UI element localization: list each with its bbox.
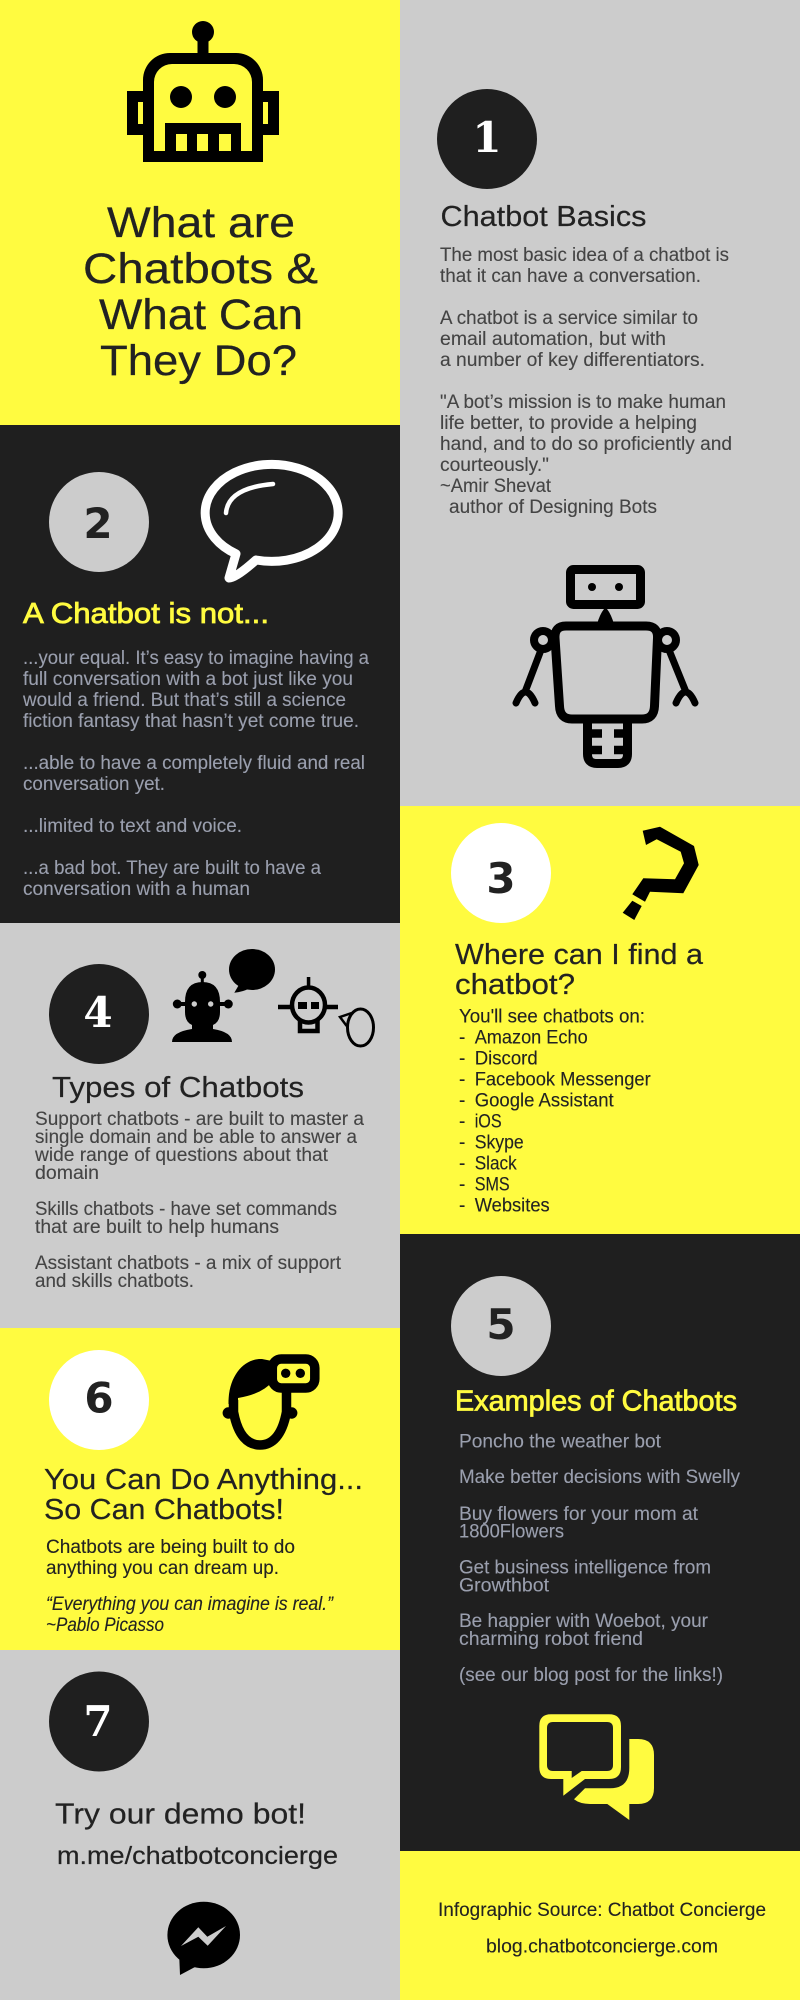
number badge 7: 7 (83, 1697, 113, 1746)
title: Chatbots & (83, 245, 318, 293)
text: basics body (440, 245, 732, 518)
panel: header (0, 0, 400, 425)
heading: you can do anything (44, 1464, 363, 1526)
heading: a chatbot is not: A Chatbot is not... (23, 598, 269, 630)
text: platform list: SMS (475, 1175, 510, 1196)
heading: types of chatbots: Types of Chatbots (52, 1072, 304, 1104)
text: platform list: - (459, 1154, 465, 1175)
text: types body: wide range of questions about that (34, 1145, 329, 1166)
text: not list: ...limited to text and voice. (23, 816, 242, 837)
text: not list: ...able to have a completely fluid and real (23, 753, 365, 774)
text: not list: full conversation with a bot just like you (23, 669, 353, 690)
icon: outline robot with bubble (278, 977, 374, 1046)
text: platform list (459, 1007, 651, 1217)
panel: 5 examples of chatbots (400, 1234, 800, 1851)
text: examples list: Poncho the weather bot (459, 1432, 662, 1452)
text: examples list: Make better decisions with Swelly (459, 1467, 740, 1488)
text: picasso quote: ~Pablo Picasso (46, 1615, 164, 1636)
icon: speech bubble (205, 464, 338, 578)
text: not list: ...a bad bot. They are built to have a (23, 858, 321, 879)
text: not list (22, 648, 369, 900)
text: not list: would a friend. But that’s still a science (22, 690, 346, 711)
text: basics body: "A bot’s mission is to make human (440, 392, 726, 413)
text: basics body: A chatbot is a service similar to (440, 308, 698, 329)
number badge 7 (49, 1672, 149, 1772)
text: types body: Assistant chatbots - a mix of support (35, 1253, 342, 1274)
text: platform list: Websites (475, 1196, 550, 1217)
text: examples list (459, 1432, 740, 1686)
number badge 3 (451, 823, 551, 923)
title: They Do? (100, 337, 297, 385)
text: not list: conversation with a human (23, 879, 250, 900)
number badge 5: 5 (486, 1300, 516, 1349)
text: infographic source: Infographic Source: Chatbot Concierge (438, 1900, 766, 1921)
text: types body: that are built to help humans (35, 1217, 279, 1238)
text: platform list: Discord (475, 1049, 538, 1070)
heading: where can i find a chatbot: Where can I find a (455, 939, 704, 971)
text: basics body: life better, to provide a helping (440, 413, 697, 434)
text: platform list: You'll see chatbots on: (459, 1007, 645, 1028)
heading: chatbot basics: Chatbot Basics (440, 201, 646, 233)
text: picasso quote (46, 1594, 335, 1636)
text: examples list: Buy flowers for your mom at (459, 1504, 699, 1525)
title: What are (107, 199, 295, 247)
text: platform list: Facebook Messenger (475, 1070, 651, 1091)
text: examples list: Be happier with Woebot, your (459, 1611, 709, 1632)
number badge 2 (49, 472, 149, 572)
text: platform list: Slack (475, 1154, 517, 1175)
number badge 6: 6 (84, 1374, 114, 1422)
text: examples list: charming robot friend (459, 1629, 643, 1650)
text: platform list: - (459, 1049, 465, 1070)
text: types body: Skills chatbots - have set commands (35, 1199, 337, 1220)
link: messenger address: m.me/chatbotconcierge (57, 1842, 338, 1870)
panel: 7 try our demo bot (0, 1650, 400, 2000)
heading: you can do anything: So Can Chatbots! (44, 1494, 284, 1526)
text: basics body: a number of key differentiators. (440, 350, 705, 371)
text: platform list: - (459, 1112, 465, 1133)
text: anything body: anything you can dream up. (46, 1558, 279, 1579)
number badge 4: 4 (83, 988, 113, 1037)
text: basics body: email automation, but with (440, 329, 666, 350)
panel: footer source (400, 1851, 800, 2000)
text: blog url: blog.chatbotconcierge.com (486, 1936, 718, 1958)
text: not list: conversation yet. (23, 774, 165, 795)
number badge 1 (437, 89, 537, 189)
text: platform list: iOS (475, 1112, 502, 1133)
panel: 6 you can do anything (0, 1328, 400, 1650)
panel: 2 a chatbot is not (0, 425, 400, 923)
text: platform list: Google Assistant (475, 1091, 614, 1112)
text: not list: fiction fantasy that hasn’t yet come true. (23, 711, 359, 732)
number badge 5 (451, 1276, 551, 1376)
number badge 2: 2 (83, 499, 113, 548)
icon: chat bubbles (539, 1714, 654, 1820)
heading: try our demo bot: Try our demo bot! (55, 1798, 306, 1830)
text: platform list: - (459, 1175, 465, 1196)
text: types body: domain (35, 1163, 99, 1184)
icon: robot head (127, 21, 279, 162)
text: platform list: - (459, 1133, 465, 1154)
text: basics body: courteously." (440, 455, 549, 476)
panel: 1 chatbot basics (400, 0, 800, 806)
text: basics body: hand, and to do so proficiently and (440, 434, 732, 455)
text: basics body: author of Designing Bots (449, 497, 657, 518)
text: examples list: 1800Flowers (459, 1522, 564, 1543)
number badge 1: 1 (472, 113, 502, 162)
text: platform list: - (459, 1196, 465, 1217)
text: platform list: - (459, 1070, 465, 1091)
number badge 4 (49, 964, 149, 1064)
icon: full body robot (516, 570, 695, 764)
text: types body: and skills chatbots. (35, 1271, 194, 1292)
text: examples list: (see our blog post for the links!) (459, 1665, 723, 1686)
panel: 4 types of chatbots (0, 923, 400, 1328)
text: basics body: ~Amir Shevat (440, 476, 552, 497)
text: not list: ...your equal. It’s easy to imagine having a (23, 648, 369, 669)
number badge 3: 3 (486, 854, 516, 903)
text: platform list: Skype (475, 1133, 524, 1154)
text: types body: Support chatbots - are built to master a (35, 1109, 364, 1130)
text: anything body: Chatbots are being built to do (46, 1537, 295, 1558)
number badge 6 (49, 1350, 149, 1450)
text: platform list: Amazon Echo (475, 1028, 588, 1049)
text: platform list: - (459, 1028, 465, 1049)
icon: question mark (623, 827, 699, 920)
heading: where can i find a chatbot (455, 939, 704, 1001)
text: picasso quote: “Everything you can imagine is real.” (46, 1594, 335, 1615)
panel: 3 where can i find a chatbot (400, 806, 800, 1234)
icon: solid robot with bubble (172, 949, 275, 1042)
text: types body: single domain and be able to answer a (35, 1127, 357, 1148)
text: types body (34, 1109, 364, 1292)
text: basics body: that it can have a conversation. (440, 266, 701, 287)
title: What Can (99, 291, 303, 339)
icon: messenger (167, 1902, 240, 1975)
text: examples list: Get business intelligence from (459, 1558, 711, 1578)
text: examples list: Growthbot (459, 1575, 550, 1596)
heading: examples of chatbots: Examples of Chatbots (455, 1386, 737, 1418)
text: platform list: - (459, 1091, 465, 1112)
heading: you can do anything: You Can Do Anything... (44, 1464, 363, 1496)
heading: where can i find a chatbot: chatbot? (455, 969, 575, 1001)
title (83, 199, 318, 385)
text: basics body: The most basic idea of a chatbot is (440, 245, 729, 266)
icon: person with bot bubble (223, 1359, 315, 1445)
text: anything body (46, 1537, 295, 1579)
